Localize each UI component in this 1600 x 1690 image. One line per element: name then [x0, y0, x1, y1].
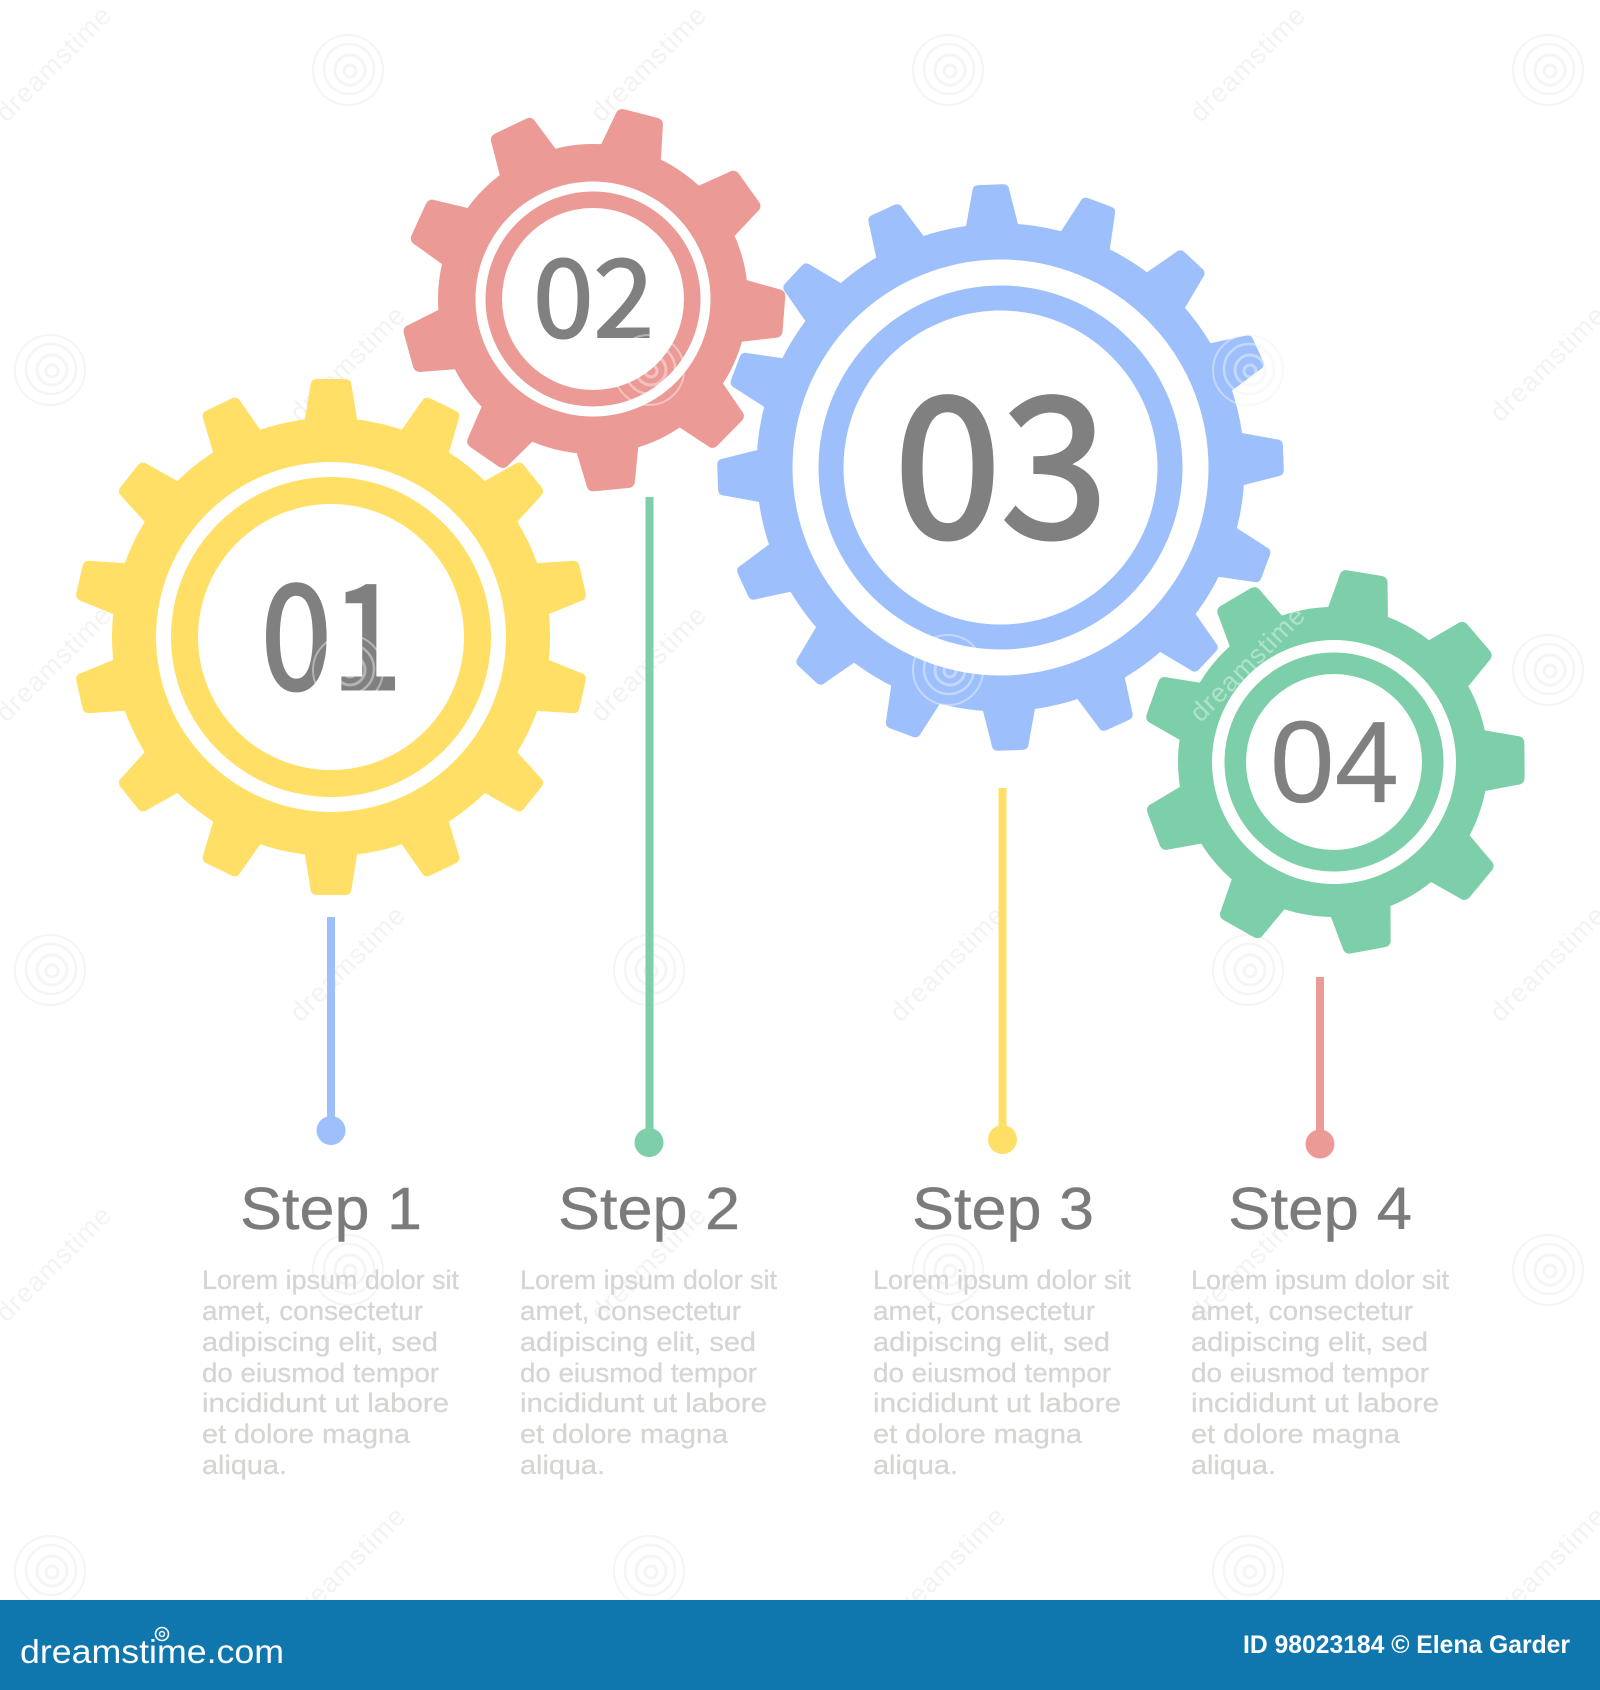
body text: step 2: aliqua. [520, 1450, 605, 1480]
heading: step 2: Step 2 [558, 1176, 740, 1242]
watermark pattern behind content: dreamstime [585, 600, 713, 728]
gear 02: red [400, 106, 786, 493]
body text: step 4: do eiusmod tempor [1191, 1358, 1429, 1388]
body text: step 1: et dolore magna [202, 1419, 411, 1449]
watermark pattern behind content: dreamstime [884, 1501, 1012, 1629]
watermark pattern behind content: dreamstime [284, 1501, 412, 1629]
connector: step 1 [316, 917, 346, 1145]
column: step 2 [520, 1176, 785, 1480]
body text: step 4: incididunt ut labore [1191, 1388, 1439, 1418]
watermark overlay on gears: dreamstime [884, 300, 1012, 428]
footer logo: dreamstime.com: dreamstime.com [20, 1633, 284, 1670]
icon: logo spiral [156, 1628, 168, 1640]
heading: step 1: Step 1 [240, 1176, 422, 1242]
body text: step 3: aliqua. [873, 1450, 958, 1480]
body text: step 3: Lorem ipsum dolor sit [873, 1265, 1131, 1295]
body text: step 2: et dolore magna [520, 1419, 729, 1449]
gear 03: blue [717, 184, 1284, 751]
body text: step 4: Lorem ipsum dolor sit [1191, 1265, 1449, 1295]
watermark pattern behind content: dreamstime [284, 900, 412, 1028]
gear 01: yellow [73, 379, 589, 895]
number 04: 04 [1270, 697, 1399, 827]
body text: step 2: Lorem ipsum dolor sit [520, 1265, 777, 1295]
body text: step 4: adipiscing elit, sed [1191, 1327, 1428, 1357]
connector: step 4 [1306, 977, 1334, 1158]
watermark overlay on gears [313, 300, 1312, 728]
watermark overlay on gears: dreamstime [1184, 600, 1312, 728]
body text: step 2: incididunt ut labore [520, 1388, 767, 1418]
body text: step 3: do eiusmod tempor [873, 1358, 1111, 1388]
body text: step 3: incididunt ut labore [873, 1388, 1121, 1418]
body text: step 2: amet, consectetur [520, 1296, 741, 1326]
body text: step 3: et dolore magna [873, 1419, 1083, 1449]
gear 04: green [1142, 568, 1525, 956]
connector: step 2 [634, 497, 664, 1157]
watermark pattern behind content: dreamstime [284, 300, 412, 428]
body text: step 4: aliqua. [1191, 1450, 1276, 1480]
body text: step 1: adipiscing elit, sed [202, 1327, 438, 1357]
number 03: 03 [894, 312, 1108, 593]
watermark pattern behind content: dreamstime [585, 0, 713, 128]
watermark pattern behind content: dreamstime [884, 300, 1012, 428]
heading: step 3: Step 3 [912, 1176, 1094, 1242]
watermark pattern behind content: dreamstime [1184, 0, 1312, 128]
connector: step 3 [988, 788, 1017, 1154]
body text: step 2: adipiscing elit, sed [520, 1327, 756, 1357]
number 02: 02 [533, 213, 654, 369]
column: step 4 [1191, 1176, 1457, 1480]
body text: step 1: amet, consectetur [202, 1296, 423, 1326]
body text: step 1: aliqua. [202, 1450, 287, 1480]
body text: step 1: Lorem ipsum dolor sit [202, 1265, 459, 1295]
watermark pattern behind content: dreamstime [1184, 600, 1312, 728]
column: step 3 [873, 1176, 1139, 1480]
heading: step 4: Step 4 [1228, 1176, 1412, 1242]
number 01: 01 [261, 521, 402, 731]
watermark pattern behind content: dreamstime [884, 900, 1012, 1028]
body text: step 3: adipiscing elit, sed [873, 1327, 1110, 1357]
gear 04 rings [1212, 640, 1456, 884]
body text: step 1: do eiusmod tempor [202, 1358, 439, 1388]
watermark pattern behind content: dreamstime [1184, 1200, 1312, 1328]
body text: step 3: amet, consectetur [873, 1296, 1095, 1326]
column: step 1 [202, 1176, 467, 1480]
body text: step 2: do eiusmod tempor [520, 1358, 757, 1388]
body text: step 4: et dolore magna [1191, 1419, 1401, 1449]
footer bar [0, 1600, 1600, 1690]
watermark pattern behind content: dreamstime [585, 1200, 713, 1328]
body text: step 1: incididunt ut labore [202, 1388, 449, 1418]
body text: step 4: amet, consectetur [1191, 1296, 1413, 1326]
footer credit: ID 98023184 © Elena Garder [1243, 1631, 1570, 1659]
